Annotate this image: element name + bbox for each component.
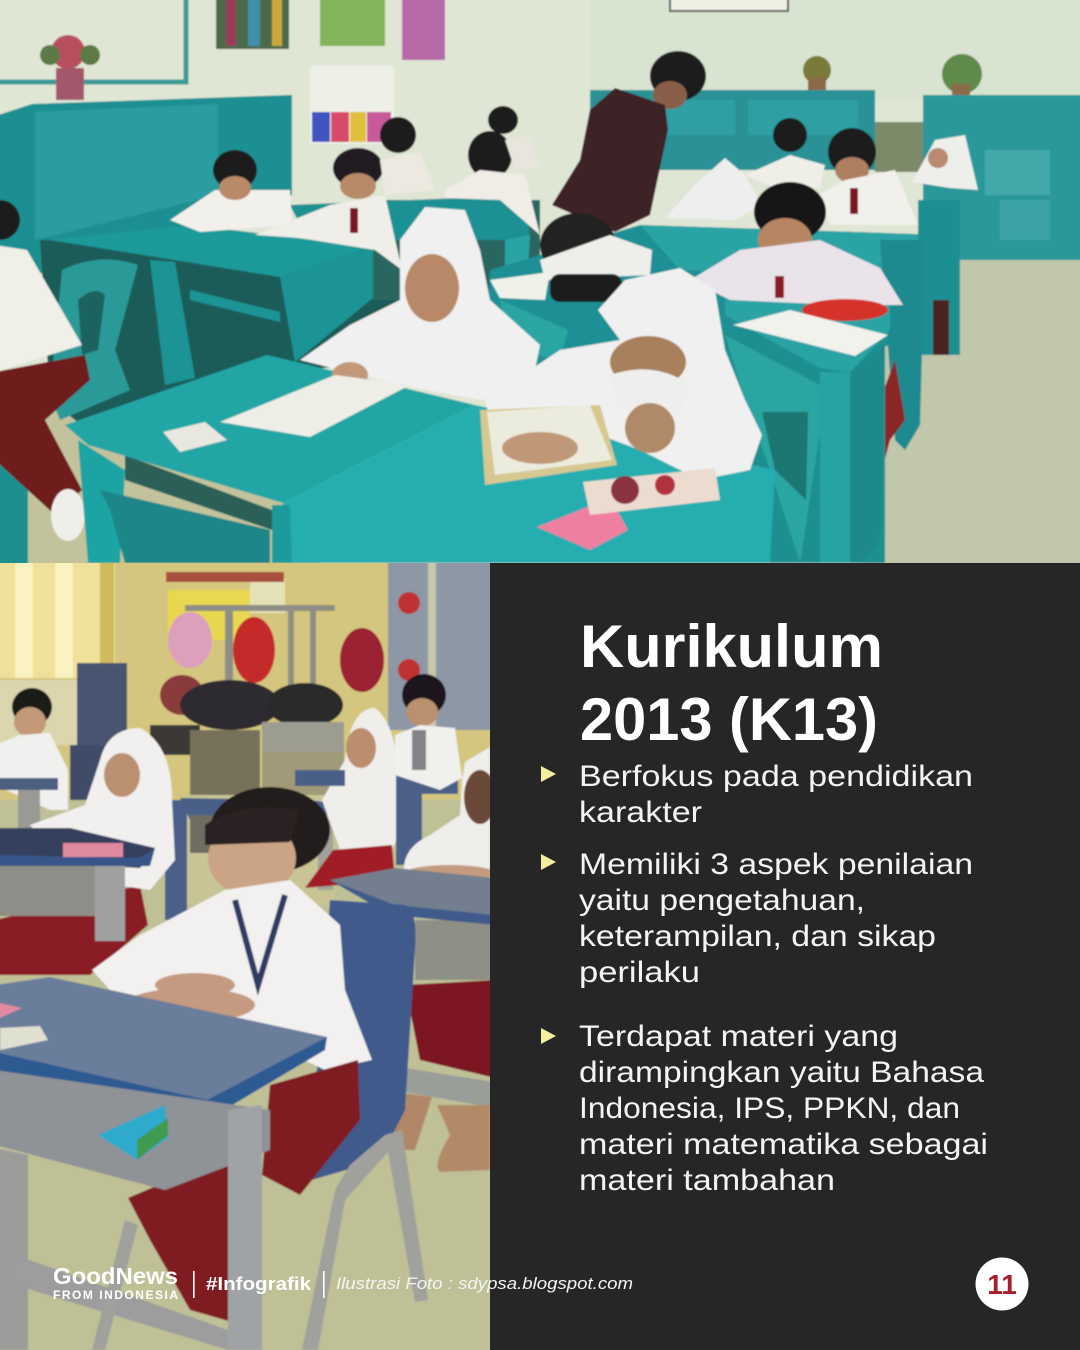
right desk bbox=[415, 920, 495, 980]
whiteboard frame bbox=[0, 0, 186, 82]
middle student head down bbox=[538, 212, 615, 259]
heading: Kurikulum 2013 (K13): 2013 (K13) bbox=[580, 686, 878, 753]
hijab student background right bbox=[665, 158, 762, 220]
back row desks bbox=[50, 225, 373, 277]
bullet: character education bbox=[541, 760, 973, 829]
panel: dark text panel bbox=[490, 563, 1080, 1350]
floor bbox=[860, 256, 1080, 580]
footer tag: #Infografik: #Infografik bbox=[206, 1273, 312, 1294]
posters bbox=[216, 0, 289, 49]
bullet: streamlined material: Terdapat materi yang bbox=[579, 1020, 898, 1053]
middle desk back bbox=[180, 797, 328, 820]
logo: GoodNews from Indonesia: GoodNews bbox=[53, 1263, 178, 1289]
footer tag: #Infografik bbox=[193, 1271, 325, 1298]
dark space below back desks bbox=[40, 240, 400, 422]
bullet: three assessment aspects: perilaku bbox=[579, 956, 700, 989]
front desks bbox=[78, 440, 125, 563]
photo: students seated in a classroom with blue desks bbox=[0, 550, 510, 1350]
rack with bags bbox=[185, 605, 335, 611]
left desk bbox=[0, 828, 155, 868]
middle hijab girl bbox=[322, 708, 405, 850]
bullet: three assessment aspects: yaitu pengetahuan, bbox=[579, 884, 865, 917]
bullet: three assessment aspects: keterampilan, dan sikap bbox=[579, 920, 936, 953]
grey pillar bbox=[387, 563, 490, 731]
front hijab girl 1 bbox=[300, 207, 540, 400]
papers on desk bbox=[220, 375, 410, 437]
chair behind glasses boy bbox=[305, 900, 416, 1182]
teacher bbox=[650, 51, 706, 101]
front right boy bbox=[754, 182, 826, 242]
bullet: streamlined material: materi matematika sebagai bbox=[579, 1128, 988, 1161]
left student bbox=[0, 245, 82, 372]
main blue desk bbox=[0, 977, 327, 1107]
boy red pants bbox=[262, 1060, 360, 1195]
window curtain bbox=[0, 550, 115, 678]
bullet: streamlined material: Indonesia, IPS, PPKN, dan bbox=[579, 1092, 960, 1125]
glasses boy bbox=[210, 787, 330, 873]
photo: students taking a test in a classroom with teal desks bbox=[0, 0, 1080, 580]
bullet: streamlined material bbox=[541, 1020, 988, 1197]
bullet: streamlined material: dirampingkan yaitu Bahasa bbox=[579, 1056, 984, 1089]
chair legs bbox=[385, 1130, 428, 1302]
bullet: three assessment aspects bbox=[541, 848, 973, 989]
page number badge: 11 bbox=[987, 1269, 1017, 1300]
heading: Kurikulum 2013 (K13): Kurikulum bbox=[580, 613, 883, 680]
students back row bbox=[213, 150, 257, 190]
hijab girl left bbox=[165, 800, 187, 920]
right column desks bbox=[485, 225, 945, 400]
far left student bbox=[12, 688, 52, 726]
heading: Kurikulum 2013 (K13) bbox=[580, 613, 883, 753]
bullet: streamlined material: materi tambahan bbox=[579, 1164, 835, 1197]
plastic chair beside left student bbox=[50, 260, 138, 420]
bullet: three assessment aspects: Memiliki 3 aspek penilaian bbox=[579, 848, 973, 881]
poster and red decorations bbox=[168, 590, 250, 640]
right boy background bbox=[402, 674, 446, 716]
front hijab girl 2 bbox=[485, 268, 762, 480]
front right desk and chair bbox=[742, 346, 886, 563]
page number badge bbox=[976, 1258, 1028, 1310]
photo credit: Ilustrasi Foto : sdypsa.blogspot.com bbox=[336, 1275, 633, 1293]
logo: GoodNews from Indonesia: FROM INDONESIA bbox=[53, 1288, 178, 1302]
flowers bbox=[51, 35, 85, 69]
logo: GoodNews from Indonesia bbox=[53, 1263, 178, 1302]
floor bbox=[0, 800, 510, 1350]
right hijab girl bbox=[404, 747, 490, 880]
bullet: character education: Berfokus pada pendidikan bbox=[579, 760, 973, 793]
bullet: character education: karakter bbox=[579, 796, 702, 829]
teal cabinets bbox=[0, 95, 292, 290]
